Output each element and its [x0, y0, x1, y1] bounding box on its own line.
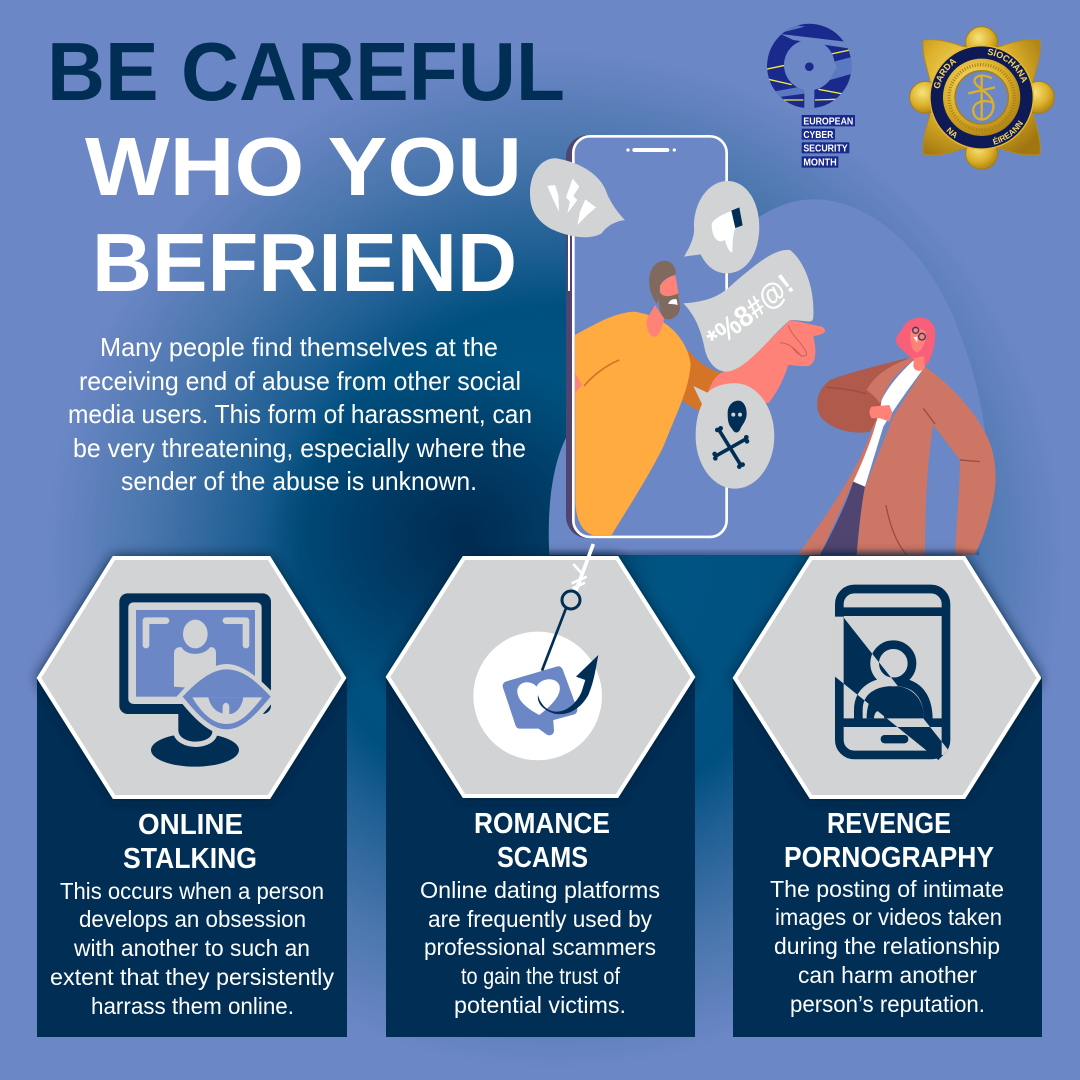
- description: person’s reputation.: [790, 991, 985, 1017]
- description: harrass them online.: [91, 993, 294, 1019]
- icon: phone with person: [835, 589, 948, 760]
- intro text block: be very threatening, especially where the: [73, 433, 526, 463]
- panel: romance scams: [386, 544, 695, 1037]
- heading: SCAMS: [497, 842, 588, 874]
- panel: online stalking: [37, 558, 347, 1037]
- logo: European Cyber Security Month: MONTH: [803, 158, 837, 169]
- title: [47, 25, 565, 309]
- angry man: [575, 261, 825, 535]
- description: [420, 877, 660, 1018]
- description: [50, 878, 334, 1019]
- description: images or videos taken: [775, 904, 1002, 930]
- panel background: [386, 677, 695, 1037]
- title: BEFRIEND: [92, 216, 517, 309]
- heading: [784, 808, 994, 874]
- logo: European Cyber Security Month: EUROPEAN: [803, 116, 853, 127]
- heading: ROMANCE: [474, 808, 610, 840]
- description: The posting of intimate: [770, 876, 1004, 902]
- panel: revenge pornography: [733, 558, 1042, 1037]
- woman character: [798, 318, 996, 555]
- description: during the relationship: [774, 933, 1000, 959]
- title: BE CAREFUL: [47, 25, 565, 118]
- description: can harm another: [798, 962, 977, 988]
- bubble: lightning: [530, 158, 625, 237]
- intro text block: sender of the abuse is unknown.: [121, 466, 477, 496]
- logo: Garda badge: ÉIREANN: [992, 120, 1023, 145]
- logo: European Cyber Security Month: CYBER: [803, 130, 833, 141]
- hexagon: [735, 558, 1039, 797]
- bubble: swearing symbols: [683, 250, 813, 372]
- heading: PORNOGRAPHY: [784, 842, 994, 874]
- description: extent that they persistently: [50, 964, 334, 990]
- description: [770, 876, 1004, 1017]
- hexagon: [388, 558, 693, 796]
- intro text block: Many people find themselves at the: [100, 332, 498, 362]
- bubble: skull and crossbones: [693, 383, 774, 489]
- logo: Garda badge: [909, 26, 1055, 170]
- logo: European Cyber Security Month: [766, 24, 855, 169]
- description: potential victims.: [454, 992, 626, 1018]
- logo: Garda badge: SÍOCHÁNA: [988, 48, 1028, 84]
- bubble: swearing symbols: *%8#@!: [701, 268, 800, 355]
- illustration: phone abuse scene: [530, 135, 996, 555]
- description: to gain the trust of: [461, 963, 621, 989]
- heading: [123, 809, 257, 875]
- intro text block: receiving end of abuse from other social: [79, 366, 521, 396]
- title: WHO YOU: [85, 120, 522, 213]
- background arch: [549, 199, 985, 555]
- intro text block: media users. This form of harassment, can: [68, 399, 532, 429]
- heading: REVENGE: [827, 808, 951, 840]
- heading: ONLINE: [138, 809, 243, 841]
- description: are frequently used by: [428, 906, 652, 932]
- heading: STALKING: [123, 843, 257, 875]
- description: develops an obsession: [79, 906, 306, 932]
- heading: [474, 808, 610, 874]
- description: with another to such an: [73, 935, 310, 961]
- phone: [566, 135, 727, 538]
- logo: European Cyber Security Month: SECURITY: [803, 144, 848, 155]
- description: This occurs when a person: [60, 878, 324, 904]
- panel background: [733, 677, 1042, 1037]
- description: Online dating platforms: [420, 877, 660, 903]
- shadow at base of illustration: [549, 548, 979, 555]
- intro text block: [68, 332, 532, 496]
- description: professional scammers: [424, 934, 656, 960]
- icon: hook with heart message: [473, 544, 602, 760]
- bubble: thumbs down: [684, 181, 759, 273]
- logo: Garda badge: NA: [946, 127, 957, 138]
- panel background: [37, 678, 347, 1037]
- icon: monitor with eye: [119, 593, 277, 767]
- logo: Garda badge: GARDA: [934, 58, 956, 88]
- hexagon: [39, 558, 344, 797]
